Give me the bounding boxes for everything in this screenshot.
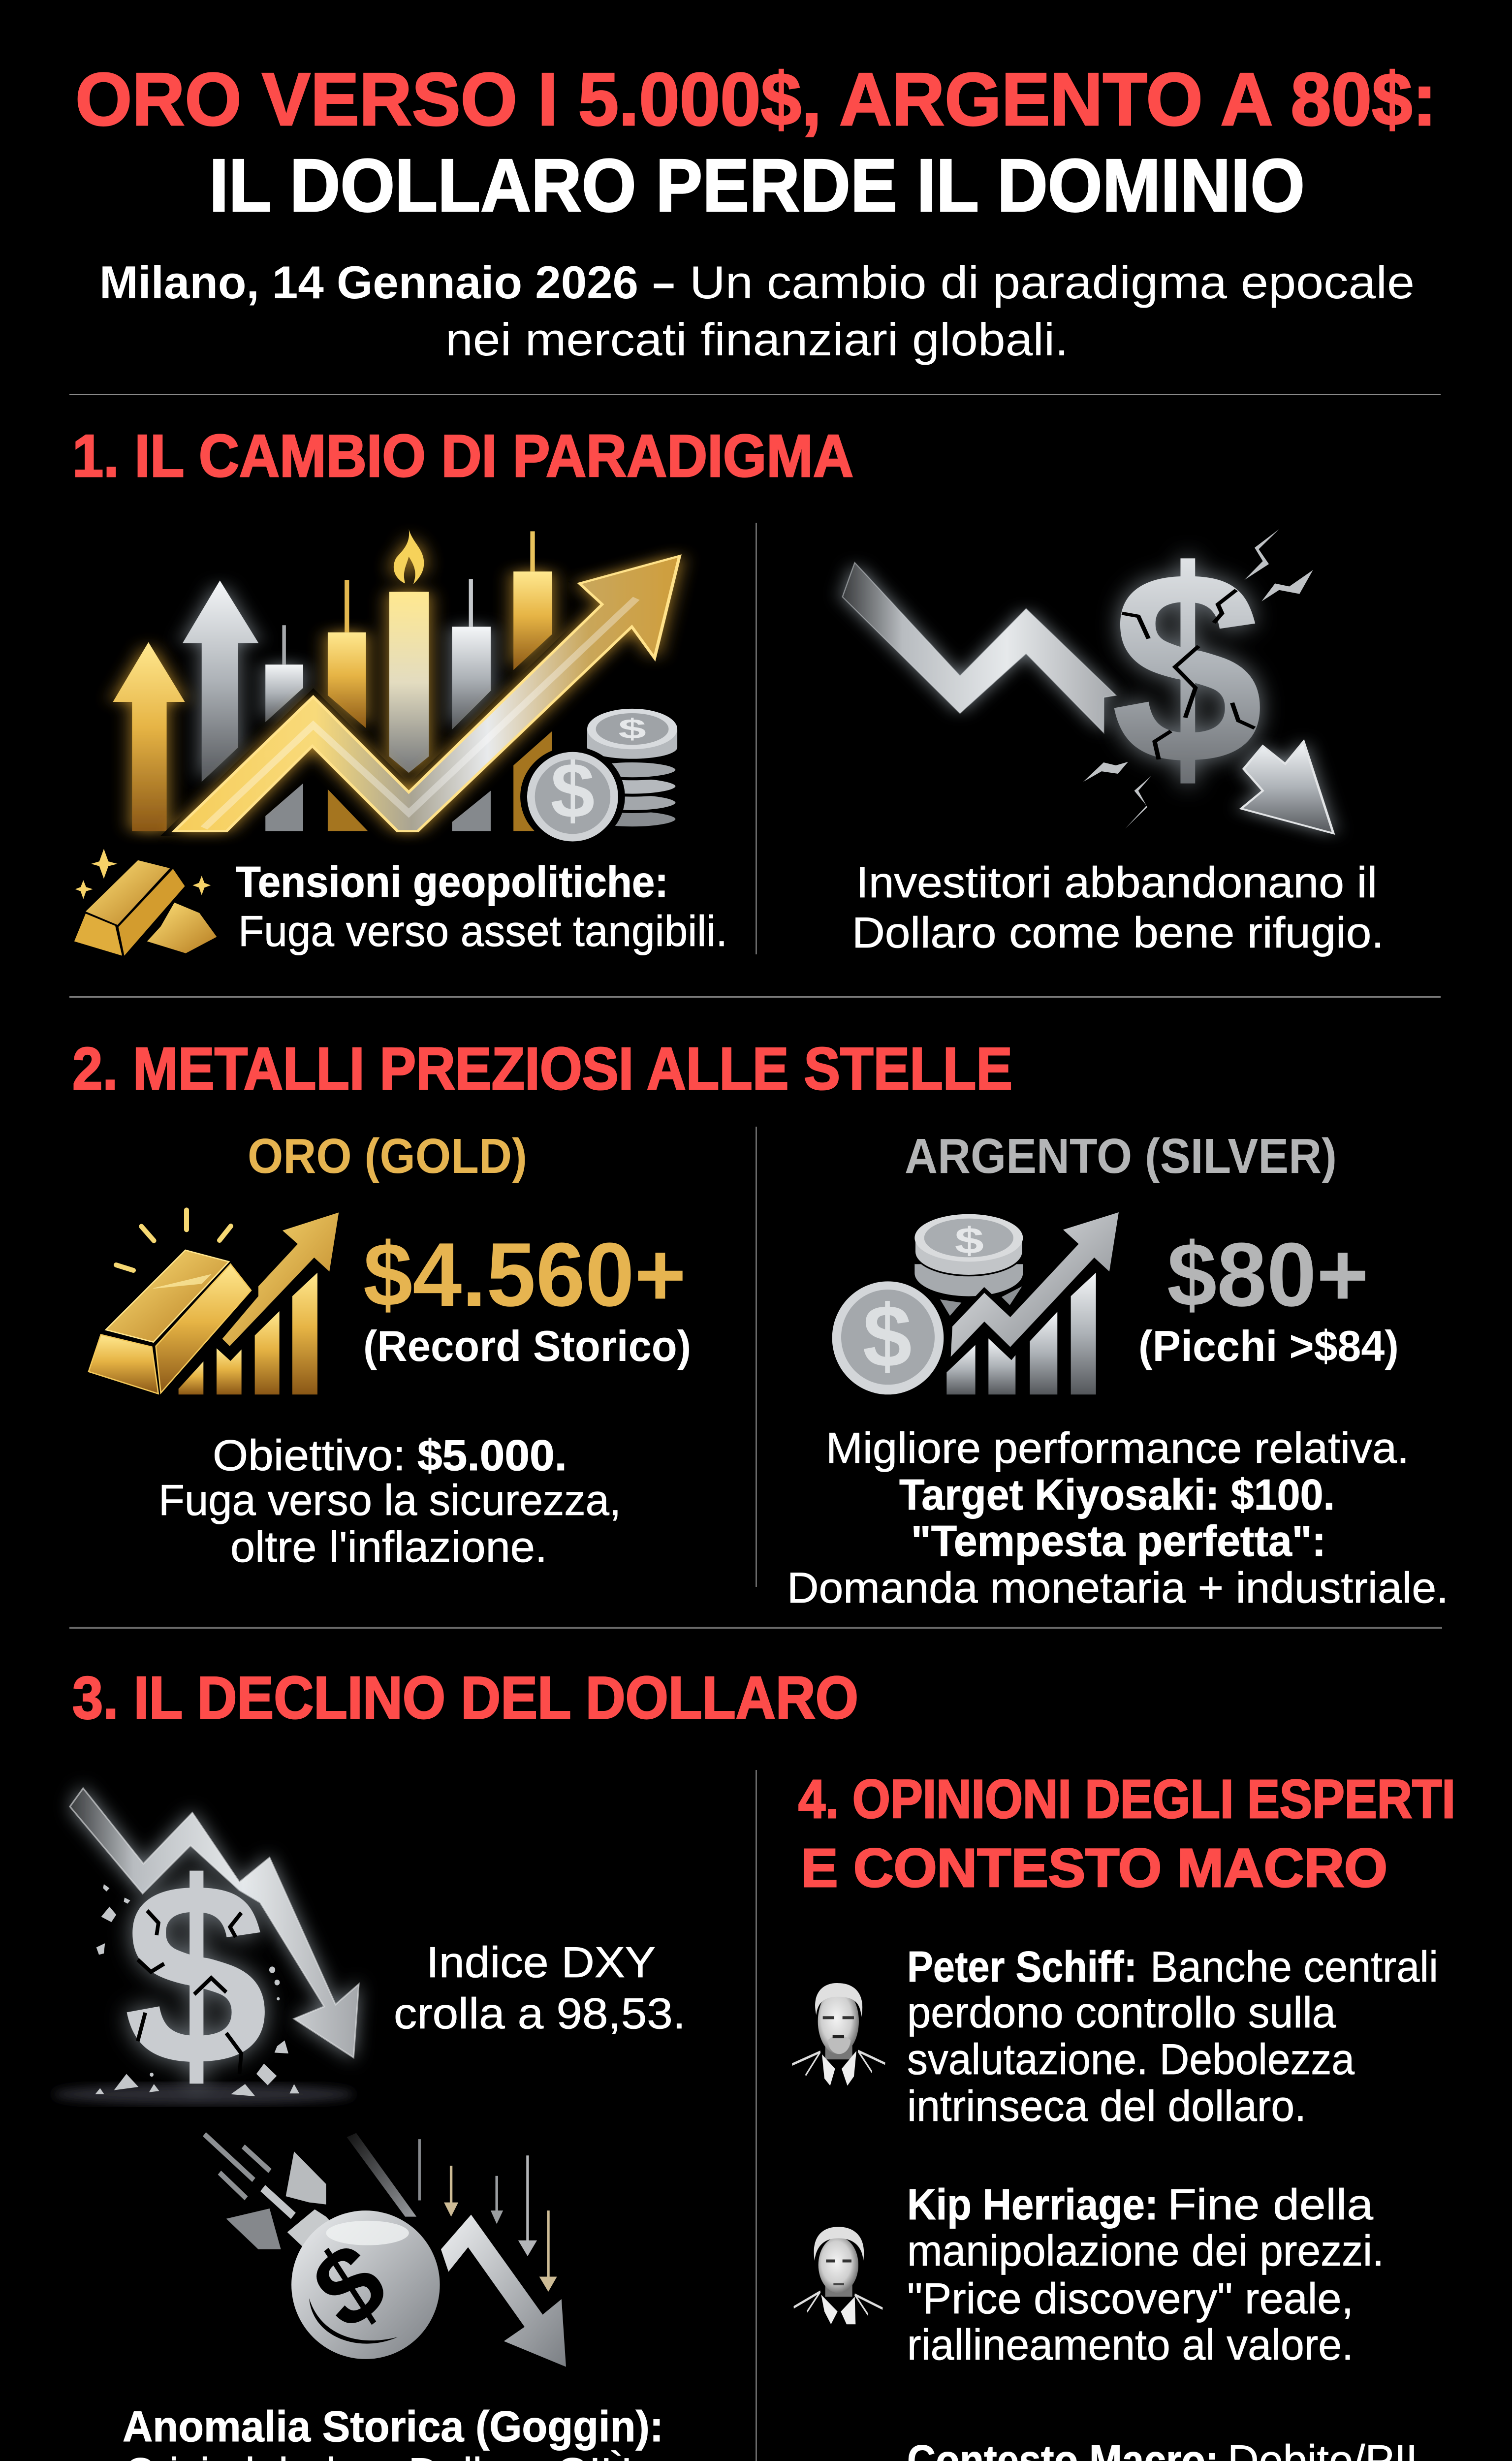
text: geopolitical tensions: Fuga verso asset tangibili. bbox=[238, 907, 727, 955]
portrait: Peter Schiff bbox=[792, 1983, 885, 2086]
text: geopolitical tensions: Tensioni geopolitiche: bbox=[236, 857, 668, 906]
heading: section 4: E CONTESTO MACRO bbox=[801, 1838, 1387, 1898]
title: IL DOLLARO PERDE IL DOMINIO bbox=[209, 144, 1305, 227]
text: geopolitical tensions bbox=[236, 857, 727, 955]
subtitle: – bbox=[653, 256, 675, 308]
gold description: Obiettivo: bbox=[213, 1431, 406, 1480]
text: DXY index: Indice DXY bbox=[426, 1938, 656, 1987]
icon: silver coins with rising chart: $ bbox=[863, 1287, 912, 1386]
heading: gold: ORO (GOLD) bbox=[248, 1129, 527, 1184]
text: macro context bbox=[907, 2436, 1430, 2461]
heading: section 4 bbox=[798, 1769, 1455, 1898]
silver description: Domanda monetaria + industriale. bbox=[787, 1563, 1449, 1612]
gold description: oltre l'inflazione. bbox=[230, 1522, 547, 1571]
text: investors abandon dollar: Investitori abbandonano il bbox=[856, 858, 1377, 907]
gold description: Fuga verso la sicurezza, bbox=[158, 1476, 621, 1524]
icon: gold bars with sparkles bbox=[74, 849, 217, 956]
icon: rising gold and silver chart with coins bbox=[113, 529, 680, 847]
text: Kip Herriage: Kip Herriage: bbox=[907, 2180, 1158, 2229]
icon: silver coins with rising chart bbox=[830, 1212, 1119, 1397]
title bbox=[75, 58, 1437, 227]
title: ORO VERSO I 5.000$, ARGENTO A 80$: bbox=[75, 58, 1437, 141]
icon: crumbling dollar with falling chart bbox=[53, 1788, 359, 2120]
icon: rising gold and silver chart with coins: $ bbox=[550, 747, 595, 834]
text: DXY index bbox=[394, 1938, 686, 2038]
text: Peter Schiff: perdono controllo sulla bbox=[907, 1988, 1336, 2037]
gold note: (Record Storico) bbox=[363, 1322, 691, 1370]
portrait: Kip Herriage bbox=[794, 2227, 882, 2324]
subtitle: Un cambio di paradigma epocale bbox=[690, 256, 1415, 308]
text: Peter Schiff: svalutazione. Debolezza bbox=[907, 2035, 1354, 2083]
heading: section 4: 4. OPINIONI DEGLI ESPERTI bbox=[798, 1769, 1455, 1830]
silver description bbox=[787, 1423, 1449, 1612]
text: Kip Herriage: riallineamento al valore. bbox=[907, 2320, 1354, 2369]
icon: crumbling dollar with falling chart: $ bbox=[124, 1829, 268, 2120]
heading: section 2: 2. METALLI PREZIOSI ALLE STELLE bbox=[72, 1035, 1012, 1102]
text: historical anomaly: Anomalia Storica (Goggin): bbox=[123, 2402, 663, 2451]
text: Kip Herriage: "Price discovery" reale, bbox=[907, 2274, 1354, 2323]
silver description: Target Kiyosaki: $100. bbox=[899, 1470, 1335, 1519]
text: Peter Schiff bbox=[907, 1942, 1438, 2130]
text: Kip Herriage: Fine della bbox=[1167, 2180, 1373, 2229]
text: investors abandon dollar bbox=[852, 858, 1384, 957]
text: Peter Schiff: Banche centrali bbox=[1150, 1942, 1438, 1991]
text: Peter Schiff: Peter Schiff: bbox=[907, 1942, 1137, 1991]
silver note: (Picchi >$84) bbox=[1138, 1322, 1399, 1370]
icon: gold bar with rising chart bbox=[89, 1210, 339, 1394]
subtitle bbox=[99, 256, 1415, 365]
silver description: Migliore performance relativa. bbox=[826, 1423, 1409, 1472]
silver price: $80+ bbox=[1167, 1224, 1369, 1325]
text: investors abandon dollar: Dollaro come bene rifugio. bbox=[852, 908, 1384, 957]
text: Peter Schiff: intrinseca del dollaro. bbox=[907, 2082, 1306, 2130]
heading: section 1: 1. IL CAMBIO DI PARADIGMA bbox=[72, 422, 853, 489]
heading: section 3: 3. IL DECLINO DEL DOLLARO bbox=[72, 1664, 858, 1731]
icon: falling chart and broken dollar bbox=[843, 513, 1333, 833]
subtitle: Milano, 14 Gennaio 2026 bbox=[99, 256, 638, 308]
gold description: $5.000. bbox=[417, 1431, 567, 1480]
silver description: "Tempesta perfetta": bbox=[911, 1516, 1326, 1565]
icon: falling chart and broken dollar: $ bbox=[1110, 513, 1264, 821]
icon: rising gold and silver chart with coins: $ bbox=[618, 714, 646, 745]
text: Kip Herriage: manipolazione dei prezzi. bbox=[907, 2226, 1384, 2275]
gold price: $4.560+ bbox=[363, 1224, 686, 1325]
heading: silver: ARGENTO (SILVER) bbox=[905, 1129, 1337, 1184]
panel: gold bbox=[89, 1129, 691, 1571]
icon: falling dollar bomb bbox=[204, 2133, 566, 2367]
icon: silver coins with rising chart: $ bbox=[955, 1220, 984, 1262]
text: Kip Herriage bbox=[907, 2180, 1384, 2369]
panel: silver bbox=[787, 1129, 1449, 1612]
text: DXY index: crolla a 98,53. bbox=[394, 1989, 686, 2038]
icon: falling dollar bomb: $ bbox=[293, 2217, 405, 2354]
gold description bbox=[158, 1431, 621, 1571]
subtitle: nei mercati finanziari globali. bbox=[445, 314, 1069, 365]
